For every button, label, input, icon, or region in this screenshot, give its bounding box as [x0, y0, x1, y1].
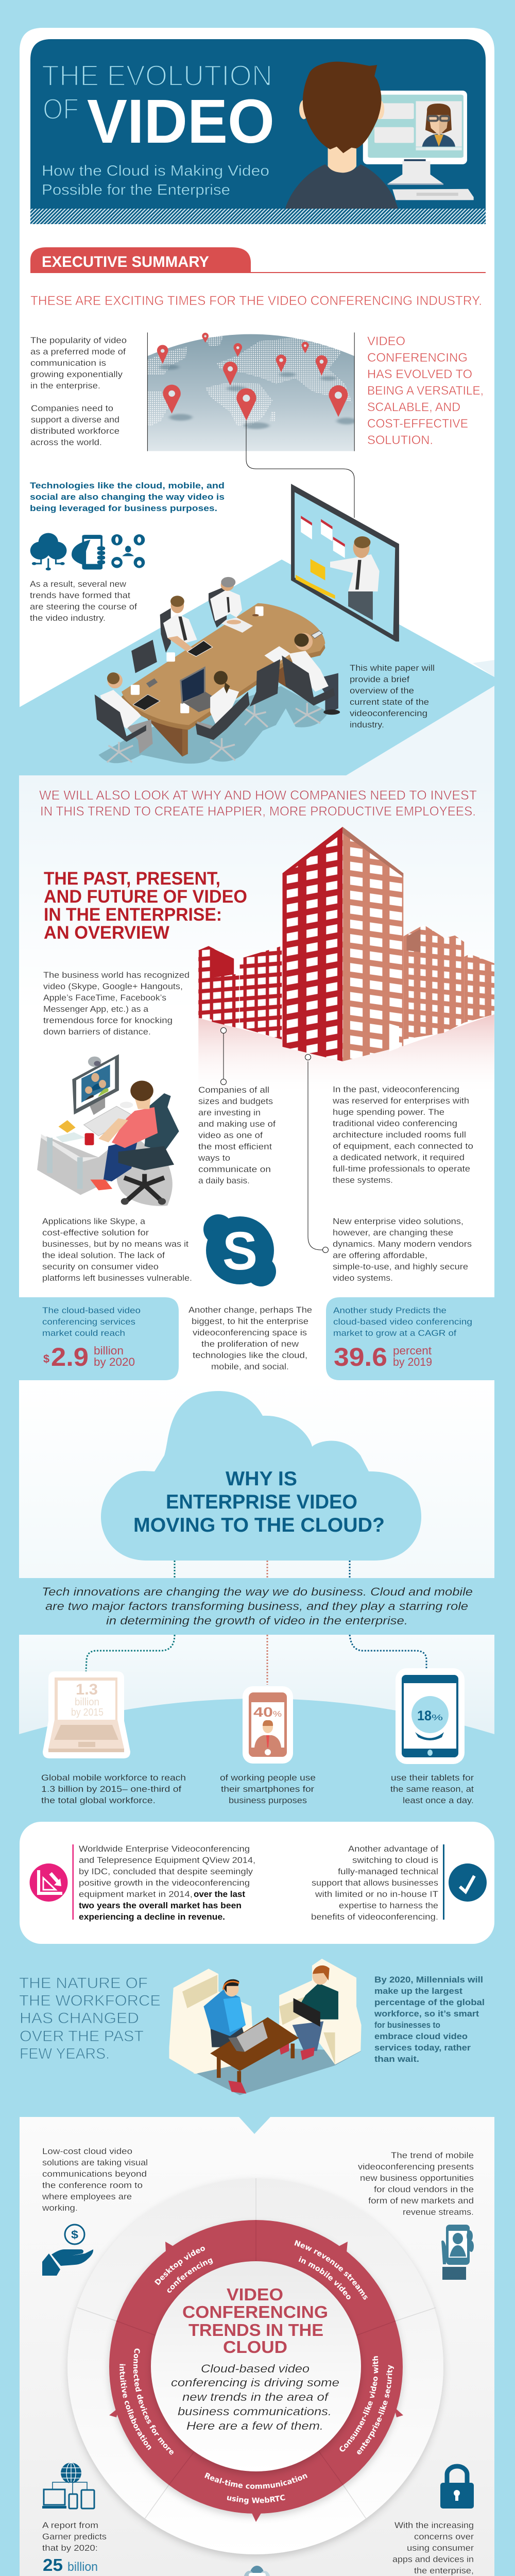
empty chairs — [131, 640, 157, 673]
callout: video conferencing has evolved: BEING A VERSATILE, — [367, 384, 484, 398]
text block: business world: tremendous force for knocking — [43, 1016, 173, 1025]
text block: applications like skype: Applications like Skype, a — [42, 1217, 146, 1226]
device: laptop 1.3 billion: 1.3 — [76, 1681, 98, 1698]
inner circle — [151, 2261, 361, 2471]
floor shadow — [98, 686, 329, 764]
text block: popularity of video: as a preferred mode of — [30, 347, 126, 357]
text block: new enterprise video: video systems. — [333, 1274, 393, 1283]
text: advantage of switching: Another advantage of — [348, 1844, 438, 1854]
headline: exciting times: THESE ARE EXCITING TIMES FOR THE VIDEO CONFERENCING INDUSTRY. — [30, 294, 482, 308]
text block: gartner report — [42, 2521, 110, 2576]
ring labels: conferencing — [167, 2258, 213, 2293]
ring labels: New revenue streams — [295, 2240, 368, 2300]
text block: business world: video (Skype, Google+ Hangouts, — [43, 982, 183, 991]
icon: webrtc logo — [229, 2566, 285, 2576]
text block: applications like skype: platforms left businesses vulnerable. — [42, 1274, 192, 1283]
device: laptop 1.3 billion: billion — [75, 1697, 99, 1708]
hatched strip — [30, 209, 486, 224]
icon: skype: S — [222, 1221, 258, 1281]
monitor — [72, 1054, 119, 1115]
stat card: CAGR — [326, 1297, 494, 1380]
text block: millennials: than wait. — [374, 2055, 419, 2064]
text block: popularity of video: communication is — [30, 359, 106, 368]
ring labels: intuitive collaboration — [119, 2364, 151, 2450]
cloud heading — [101, 1391, 421, 1561]
text block: in the past — [332, 1085, 473, 1185]
text block: in the past: these systems. — [333, 1176, 393, 1185]
text block: trend of mobile: new business opportunities — [360, 2174, 474, 2183]
center title: VIDEO — [227, 2285, 283, 2304]
dome background — [19, 1699, 494, 1822]
panel: video conferencing trends — [20, 2117, 494, 2576]
text block: business world: down barriers of distance. — [43, 1027, 151, 1037]
text block: millennials — [374, 1975, 485, 2064]
device: tablet 18 percent — [396, 1668, 465, 1764]
stat card: CAGR: Another study Predicts the — [333, 1306, 447, 1315]
captions: device statistics: of working people use — [220, 1773, 316, 1783]
text block: trend of mobile: revenue streams. — [403, 2208, 474, 2217]
stat card: market reach: The cloud-based video — [42, 1306, 141, 1315]
center text — [171, 2362, 339, 2432]
text block: security concerns: the enterprise, — [414, 2566, 474, 2575]
text block: another change: biggest, to hit the enterprise — [192, 1317, 308, 1326]
text block: another change: videoconferencing space is — [193, 1328, 307, 1337]
callout: video conferencing has evolved — [367, 334, 484, 447]
title: THE EVOLUTION — [42, 59, 272, 92]
text block: new enterprise video: are offering affordable, — [333, 1251, 427, 1260]
title — [42, 59, 274, 156]
text block: companies of all sizes: a daily basis. — [198, 1176, 250, 1185]
text: advantage of switching: support that allows businesses — [312, 1878, 438, 1888]
illustration: meeting room — [95, 484, 399, 764]
heading: nature of the workforce — [19, 1975, 161, 2062]
stat card: market reach: by 2020 — [94, 1355, 135, 1368]
text block: low-cost cloud video: Low-cost cloud video — [42, 2147, 132, 2156]
dotted connectors — [86, 1561, 426, 1685]
text block: in the past: In the past, videoconferencing — [333, 1085, 459, 1094]
person: grey hair — [209, 577, 242, 628]
text block: white paper: current state of the — [350, 698, 429, 707]
chair bases — [107, 703, 321, 762]
stat card: CAGR: 39.6 — [334, 1343, 387, 1371]
center title: CONFERENCING — [182, 2302, 328, 2321]
text: advantage of switching — [311, 1844, 438, 1922]
stat card: market reach — [19, 1297, 179, 1380]
text block: security concerns: With the increasing — [394, 2521, 474, 2530]
text block: trend of mobile — [358, 2151, 474, 2217]
text block: applications like skype: security on consumer video — [42, 1262, 159, 1272]
right person — [279, 1965, 338, 2060]
text block: white paper: overview of the — [350, 686, 414, 696]
callout: video conferencing has evolved: VIDEO — [367, 334, 405, 348]
text block: popularity of video: in the enterprise. — [30, 381, 100, 391]
text block: companies of all sizes — [198, 1086, 276, 1185]
icon: social network — [111, 534, 145, 568]
text block: millennials: workforce, so it’s smart — [374, 2009, 479, 2019]
icon: phone in hand — [441, 2225, 474, 2280]
text block: trend of mobile: form of new markets and — [368, 2196, 474, 2206]
text block: security concerns: concerns over — [414, 2532, 474, 2541]
text block: business world: Messenger App, etc.) as a — [43, 1005, 149, 1014]
text block: millennials: embrace cloud video — [374, 2032, 468, 2041]
text block: as a result: the video industry. — [30, 614, 106, 623]
headline: we will also look — [39, 788, 477, 819]
connector: map to meeting screen — [246, 420, 354, 518]
world map with location pins — [147, 332, 356, 451]
text: advantage of switching: expertise to harness the — [339, 1901, 438, 1910]
device: laptop 1.3 billion — [43, 1671, 130, 1758]
text block: low-cost cloud video: communications beyond — [42, 2170, 147, 2179]
captions: device statistics: the same reason, at — [390, 1785, 474, 1794]
device: laptop 1.3 billion: by 2015 — [71, 1707, 104, 1718]
text block: popularity of video: support a diverse and — [31, 415, 119, 425]
headline: we will also look: WE WILL ALSO LOOK AT WHY AND HOW COMPANIES NEED TO INVEST — [39, 788, 477, 803]
center text: Cloud-based video — [201, 2362, 310, 2375]
text block: new enterprise video: New enterprise video solutions, — [333, 1217, 464, 1226]
text block: millennials: services today, rather — [374, 2043, 471, 2053]
device: smartphone 40 percent — [243, 1686, 293, 1764]
ring labels: Connected devices for more — [133, 2348, 174, 2455]
text block: gartner report: billion — [67, 2560, 98, 2574]
subtitle — [42, 163, 269, 198]
text block: applications like skype: cost-effective solution for — [42, 1228, 149, 1238]
text: advantage of switching: fully-managed technical — [338, 1867, 438, 1876]
connectors: small lines with round ends — [220, 1027, 329, 1253]
text block: low-cost cloud video: working. — [42, 2204, 78, 2213]
callout: video conferencing has evolved: COST-EFFECTIVE — [367, 417, 468, 431]
stat card: CAGR: market to grow at a CAGR of — [333, 1329, 456, 1338]
text block: popularity of video: across the world. — [30, 438, 102, 447]
center title: CLOUD — [223, 2337, 287, 2357]
right chair — [279, 1959, 362, 2064]
ring labels: Real-time communication — [204, 2472, 308, 2489]
text block: low-cost cloud video: solutions are taking visual — [42, 2158, 148, 2167]
text block: low-cost cloud video: the conference room to — [42, 2181, 143, 2190]
ring labels: using WebRTC — [227, 2495, 285, 2504]
person: right side — [282, 633, 340, 715]
text block: another change: technologies like the cloud, — [193, 1351, 307, 1360]
text block: security concerns — [392, 2521, 474, 2576]
icon: skype — [203, 1214, 276, 1286]
text: decline in revenue: by IDC, concluded that despite seemingly — [79, 1867, 253, 1876]
text block: business world — [43, 971, 190, 1037]
icon: lock — [440, 2466, 474, 2509]
icon: dollar in hand: $ — [71, 2228, 78, 2241]
text block: technologies: being leveraged for business purposes. — [30, 503, 217, 513]
stat card: market reach: conferencing services — [42, 1317, 135, 1327]
text block: as a result: As a result, several new — [30, 580, 126, 589]
ring labels: Desktop video — [154, 2246, 205, 2285]
captions: device statistics: 1.3 billion by 2015– one-third of — [41, 1785, 181, 1794]
center text: business communications. — [178, 2405, 332, 2418]
text block: gartner report: 25 — [43, 2555, 63, 2574]
heading: past present future: AN OVERVIEW — [44, 923, 169, 943]
stat card: CAGR: by 2019 — [393, 1355, 432, 1368]
text block: another change — [188, 1306, 312, 1371]
captions: device statistics — [41, 1773, 474, 1805]
text: decline in revenue: over the last — [194, 1890, 246, 1899]
panel: why is enterprise video moving to the cloud — [19, 1380, 494, 1738]
text block: new enterprise video: simple-to-use, and highly secure — [333, 1262, 468, 1272]
ring dividers — [77, 2178, 436, 2519]
text block: popularity of video: Companies need to — [31, 404, 113, 413]
heading tab: executive summary: EXECUTIVE SUMMARY — [42, 253, 209, 270]
floor: meeting room — [19, 560, 494, 775]
captions: device statistics: the total global workforce. — [41, 1796, 156, 1805]
device: smartphone 40 percent: 40 — [253, 1704, 273, 1720]
text block: companies of all sizes: and making use of — [198, 1120, 276, 1129]
red ring — [109, 2220, 403, 2522]
text block: gartner report: A report from — [42, 2521, 98, 2530]
text block: companies of all sizes: sizes and budgets — [198, 1097, 273, 1106]
panel: light section background — [19, 660, 494, 1297]
band: tech innovations: Tech innovations are changing the way we do business. Cloud and mobile — [42, 1585, 473, 1598]
text block: popularity of video: The popularity of video — [30, 336, 127, 345]
heading: past present future: THE PAST, PRESENT, — [44, 869, 220, 889]
captions: device statistics: their smartphones for — [221, 1785, 315, 1794]
text block: another change: mobile, and social. — [211, 1362, 289, 1371]
callout: video conferencing has evolved: SCALABLE, AND — [367, 400, 460, 414]
stat card: market reach: billion — [94, 1344, 124, 1357]
text block: in the past: of equipment, each connected to — [333, 1142, 473, 1151]
heading tab: executive summary — [30, 247, 486, 273]
text block: technologies — [30, 481, 225, 513]
title: OF — [43, 93, 79, 126]
text block: white paper: industry. — [350, 720, 384, 730]
center text: new trends in the area of — [182, 2391, 330, 2403]
text block: gartner report: that by 2020: — [42, 2544, 98, 2553]
stat card: market reach: 2.9 — [51, 1343, 89, 1371]
icon: phone in hand — [72, 535, 105, 569]
text block: popularity of video — [30, 336, 127, 447]
center title: TRENDS IN THE — [188, 2320, 323, 2340]
main tower — [283, 827, 403, 1061]
icon: check mark — [449, 1863, 487, 1902]
reflection — [198, 1014, 494, 1096]
outer ring — [67, 2178, 443, 2554]
text block: white paper: provide a brief — [350, 675, 409, 684]
salmon buildings — [403, 925, 494, 1039]
text block: in the past: was reserved for enterprises with — [332, 1096, 469, 1106]
text block: in the past: traditional video conferencing — [333, 1119, 457, 1128]
cloud heading: ENTERPRISE VIDEO — [166, 1491, 357, 1513]
captions: device statistics: business purposes — [229, 1796, 307, 1805]
text block: security concerns: apps and devices in — [392, 2555, 474, 2564]
heading: nature of the workforce: FEW YEARS. — [20, 2045, 110, 2062]
icon: cloud — [30, 533, 66, 570]
text block: low-cost cloud video — [42, 2147, 148, 2213]
captions: device statistics: Global mobile workforce to reach — [41, 1773, 186, 1783]
heading: nature of the workforce: THE NATURE OF — [19, 1975, 148, 1992]
left person — [203, 1979, 246, 2047]
callout: video conferencing has evolved: HAS EVOLVED TO — [367, 367, 472, 381]
title: VIDEO — [87, 86, 274, 156]
center title — [182, 2285, 328, 2357]
illustration: person at desktop video call — [37, 1054, 179, 1206]
callout: video conferencing has evolved: CONFERENCING — [367, 351, 468, 365]
text block: millennials: for businesses to — [374, 2021, 440, 2030]
text block: in the past: a dedicated network, it required — [333, 1153, 465, 1162]
text: decline in revenue: two years the overall market has been — [79, 1901, 242, 1910]
ring labels: Consumer-like video with — [340, 2356, 378, 2451]
text block: as a result — [30, 580, 137, 623]
text: decline in revenue: Worldwide Enterprise Videoconferencing — [79, 1844, 250, 1854]
text block: in the past: architecture included rooms full — [333, 1130, 466, 1140]
panel: market facts white card — [20, 1822, 494, 1944]
band: tech innovations — [19, 1578, 494, 1635]
illustration: two millennials with laptops — [169, 1959, 362, 2095]
text block: in the past: full-time professionals to operate — [333, 1164, 470, 1174]
text block: white paper: This white paper will — [350, 664, 435, 673]
stat card: CAGR: percent — [393, 1344, 432, 1357]
subtitle: Possible for the Enterprise — [42, 182, 230, 198]
text block: another change: the proliferation of new — [201, 1340, 299, 1349]
white strip behind stat row — [19, 1297, 494, 1380]
text block: new enterprise video: dynamics. Many modern vendors — [333, 1240, 472, 1249]
person: woman with laptop — [181, 668, 250, 740]
person — [90, 1080, 179, 1205]
text block: another change: Another change, perhaps The — [188, 1306, 312, 1315]
captions: device statistics: use their tablets for — [391, 1773, 474, 1783]
text block: popularity of video: growing exponentially — [30, 370, 123, 379]
text block: low-cost cloud video: where employees are — [42, 2192, 132, 2201]
center text: conferencing is driving some — [171, 2376, 339, 2389]
heading: past present future — [44, 869, 247, 943]
device: smartphone 40 percent: % — [273, 1710, 282, 1719]
panel: summary white card — [20, 28, 494, 707]
callout: video conferencing has evolved: SOLUTION. — [367, 433, 433, 447]
icon: connected devices — [42, 2463, 94, 2509]
text block: new enterprise video: however, are changing these — [333, 1228, 453, 1238]
ring labels: enterprise-like security — [357, 2365, 394, 2454]
text block: as a result: are steering the course of — [30, 602, 137, 612]
text block: companies of all sizes: the most efficient — [198, 1142, 272, 1151]
icon: decline chart — [30, 1863, 68, 1902]
cloud heading: WHY IS — [226, 1468, 297, 1490]
text block: business world: Apple’s FaceTime, Facebook’s — [43, 993, 166, 1003]
heading: nature of the workforce: HAS CHANGED — [20, 2010, 139, 2027]
text block: companies of all sizes: video as one of — [198, 1131, 263, 1140]
person: left with tablet — [95, 672, 160, 754]
text block: applications like skype: the ideal solution. The lack of — [42, 1251, 165, 1260]
stat card: CAGR: cloud-based video conferencing — [333, 1317, 472, 1327]
text block: popularity of video: distributed workforce — [30, 427, 119, 436]
band: tech innovations: are two major factors transforming business, and they play a starring role — [45, 1600, 468, 1613]
heading: past present future: IN THE ENTERPRISE: — [44, 905, 222, 925]
text: advantage of switching: switching to cloud is — [352, 1856, 438, 1865]
text block: millennials: By 2020, Millennials will — [374, 1975, 483, 1985]
person: with tablet — [160, 596, 213, 656]
text block: applications like skype — [42, 1217, 192, 1283]
heading: nature of the workforce: OVER THE PAST — [20, 2028, 144, 2045]
cloud heading: MOVING TO THE CLOUD? — [133, 1514, 385, 1536]
headline: we will also look: IN THIS TREND TO CREATE HAPPIER, MORE PRODUCTIVE EMPLOYEES. — [40, 804, 476, 819]
text block: trend of mobile: for cloud vendors in the — [374, 2185, 474, 2194]
illustration: office buildings — [198, 827, 494, 1096]
text: decline in revenue: equipment market in 2014, — [79, 1890, 193, 1899]
text block: millennials: make up the largest — [374, 1987, 463, 1996]
text block: technologies: social are also changing the way video is — [30, 492, 225, 502]
text: advantage of switching: benefits of videoconferencing. — [311, 1912, 438, 1922]
table and laptop — [210, 2017, 299, 2094]
small red buildings — [198, 946, 282, 1039]
text block: in the past: huge spending power. The — [333, 1108, 444, 1117]
text block: as a result: trends have formed that — [30, 591, 130, 600]
center text: Here are a few of them. — [186, 2419, 323, 2432]
text block: new enterprise video — [333, 1217, 472, 1283]
ring labels — [119, 2240, 394, 2504]
icon: dollar in hand — [42, 2225, 93, 2276]
text block: companies of all sizes: Companies of all — [198, 1086, 269, 1095]
text: decline in revenue: positive growth in the videoconferencing — [79, 1878, 250, 1888]
stat card: market reach: market could reach — [42, 1329, 125, 1338]
text block: white paper — [350, 664, 435, 730]
text block: millennials: percentage of the global — [374, 1998, 485, 2007]
text block: technologies: Technologies like the cloud, mobile, and — [30, 481, 225, 490]
heading: past present future: AND FUTURE OF VIDEO — [44, 887, 247, 907]
table — [122, 603, 325, 757]
text: decline in revenue — [79, 1844, 255, 1922]
left chair — [169, 1969, 253, 2074]
ring labels: in mobile video — [299, 2256, 351, 2300]
text: decline in revenue: experiencing a decline in revenue. — [79, 1912, 225, 1922]
text block: gartner report: Garner predicts — [42, 2532, 107, 2541]
stat card: market reach: $ — [43, 1352, 49, 1365]
captions: device statistics: least once a day. — [403, 1796, 474, 1805]
device: tablet 18 percent: 18 — [417, 1708, 432, 1723]
icons: cloud, mobile, social — [30, 533, 145, 570]
subtitle: How the Cloud is Making Video — [42, 163, 269, 179]
text: advantage of switching: with limited or no in-house IT — [315, 1890, 438, 1899]
text block: business world: The business world has recognized — [43, 971, 190, 980]
text block: companies of all sizes: are investing in — [198, 1108, 261, 1117]
wall screen — [291, 484, 399, 641]
device: tablet 18 percent: % — [432, 1714, 443, 1722]
panel: header — [30, 39, 486, 224]
heading: nature of the workforce: THE WORKFORCE — [19, 1992, 161, 2009]
text block: companies of all sizes: ways to — [198, 1154, 230, 1163]
paper and mugs — [131, 606, 322, 713]
band: tech innovations: in determining the growth of video in the enterprise. — [106, 1614, 408, 1627]
illustration: man at video call monitor — [285, 62, 474, 209]
text: decline in revenue: and Telepresence Equipment QView 2014, — [79, 1856, 255, 1865]
text block: applications like skype: businesses, but by no means was it — [42, 1240, 188, 1249]
text block: white paper: videoconferencing — [350, 709, 427, 718]
text block: companies of all sizes: communicate on — [198, 1165, 271, 1174]
text block: security concerns: using consumer — [407, 2544, 474, 2553]
text block: trend of mobile: videoconferencing presents — [358, 2162, 474, 2172]
text block: trend of mobile: The trend of mobile — [391, 2151, 474, 2160]
